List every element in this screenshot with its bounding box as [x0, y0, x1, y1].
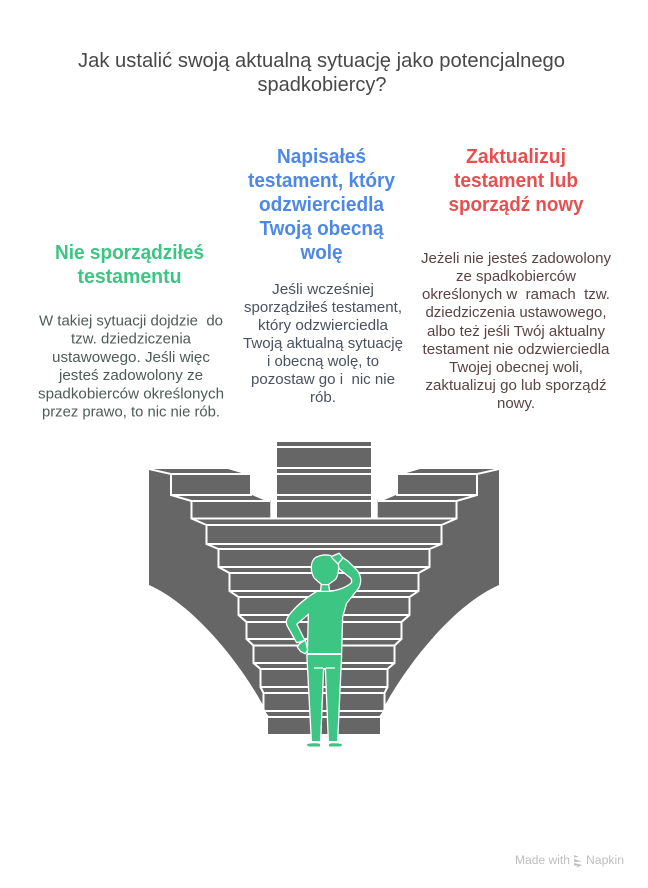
footer: Made with Napkin: Made with [515, 855, 570, 867]
text block: update will: Twojej obecnej woli, [449, 360, 583, 376]
text block: update will: testament nie odzwierciedla [422, 342, 610, 358]
text block: current will: rób. [310, 390, 336, 406]
text block: update will: albo też jeśli Twój aktualny [427, 324, 606, 340]
text block: update will: określonych w ramach tzw. [422, 287, 610, 303]
heading: no will: testamentu [78, 266, 182, 288]
text block: no will: ustawowego. Jeśli więc [52, 350, 210, 366]
heading: current will [248, 146, 396, 264]
text block: update will: Jeżeli nie jesteś zadowolony [421, 251, 612, 267]
text block: no will [38, 314, 224, 420]
text block: current will [243, 282, 403, 406]
title [78, 50, 565, 96]
icon: Napkin logo [574, 855, 582, 868]
footer: Made with Napkin [515, 855, 624, 868]
icon: thinking person [287, 554, 360, 746]
text block: no will: jesteś zadowolony ze [58, 368, 203, 384]
text block: current will: pozostaw go i nic nie [251, 372, 395, 388]
panel: current will [243, 146, 403, 406]
heading: current will: Napisałeś [277, 146, 366, 168]
footer: Made with Napkin: Napkin [586, 855, 624, 867]
staircase illustration [149, 442, 499, 734]
text block: current will: sporządziłeś testament, [244, 300, 402, 316]
heading: current will: testament, który [248, 170, 396, 192]
heading: update will: Zaktualizuj [466, 146, 566, 168]
text block: current will: który odzwierciedla [258, 318, 389, 334]
heading: no will: Nie sporządziłeś [55, 242, 204, 264]
text block: current will: Jeśli wcześniej [272, 282, 374, 298]
heading: update will: sporządź nowy [448, 194, 584, 216]
heading: update will: testament lub [454, 170, 578, 192]
text block: no will: W takiej sytuacji dojdzie do [39, 314, 223, 330]
text block: update will: dziedziczenia ustawowego, [426, 305, 606, 321]
text block: no will: tzw. dziedziczenia [71, 332, 192, 348]
panel: update will [421, 146, 612, 412]
heading: update will [448, 146, 584, 216]
text block: update will: ze spadkobierców [456, 269, 577, 285]
text block: current will: i obecną wolę, to [267, 354, 379, 370]
text block: no will: spadkobierców określonych [38, 386, 224, 402]
text block: no will: przez prawo, to nic nie rób. [42, 404, 220, 420]
heading: current will: wolę [300, 242, 342, 264]
panel: no will [38, 242, 224, 420]
heading: current will: odzwierciedla [259, 194, 385, 216]
text block: update will: zaktualizuj go lub sporządź [426, 378, 606, 394]
text block: update will [421, 251, 612, 412]
heading: current will: Twoją obecną [260, 218, 384, 240]
heading: no will [55, 242, 204, 288]
title: spadkobiercy? [258, 74, 386, 96]
text block: current will: Twoją aktualną sytuację [243, 336, 403, 352]
title: Jak ustalić swoją aktualną sytuację jako potencjalnego [78, 50, 565, 72]
text block: update will: nowy. [497, 396, 535, 412]
